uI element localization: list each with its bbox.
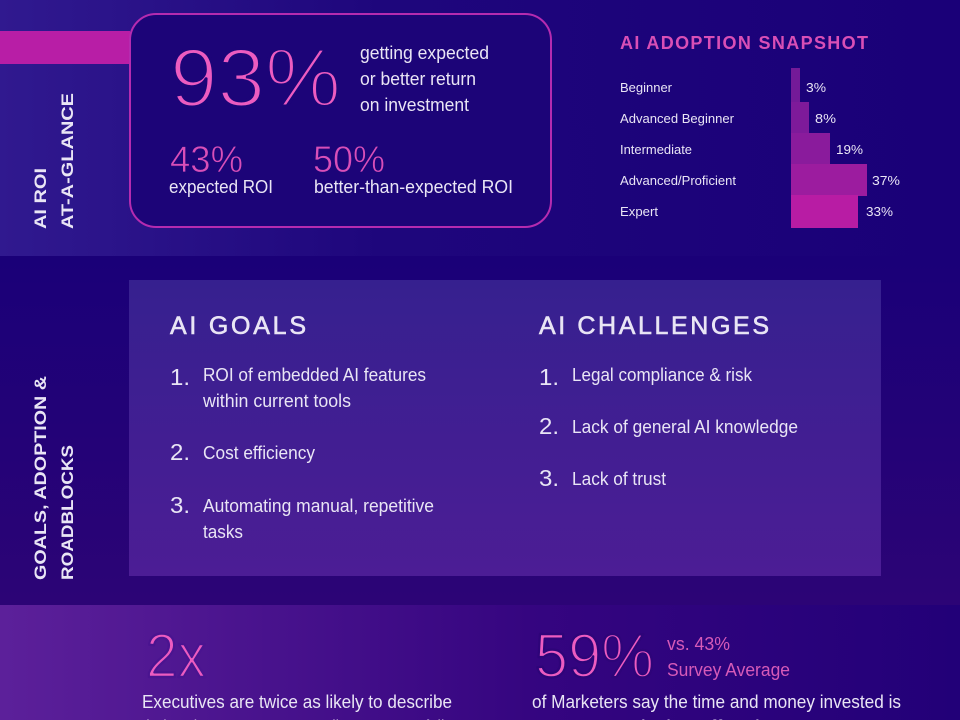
stat: 59% of marketers: vs. 43% [667,634,730,654]
chart title: AI ADOPTION SNAPSHOT [620,33,868,53]
bar values: 8% [815,111,836,126]
goal 1: 1. [170,364,190,390]
goals and challenges card [129,280,881,576]
section heading: goals, adoption and roadblocks: ROADBLOCKS [58,445,77,580]
stat: 93%: 93% [170,31,341,124]
challenge 3 [539,465,666,491]
category labels: Beginner [620,80,673,95]
category labels: Advanced/Proficient [620,173,736,188]
panel: AI ROI at-a-glance [0,0,960,256]
category labels [620,80,736,219]
magenta tab [0,31,130,64]
section heading: AI ROI at-a-glance: AI ROI [31,168,50,229]
goal 1 [170,364,426,411]
93% description: getting expected [360,43,489,63]
stat: 43% expected ROI: expected ROI [169,177,273,197]
section heading: goals, adoption and roadblocks: GOALS, ADOPTION & [31,376,50,580]
challenge 3: Lack of trust [572,469,666,489]
stat: 2x executives: 2x [146,622,206,691]
ROI stats card [130,14,551,227]
challenge 1: Legal compliance & risk [572,365,753,385]
93% description: or better return [360,69,476,89]
stat: 59% of marketers: 59% [535,622,654,691]
bar values: 19% [836,142,863,157]
bar values [806,80,900,219]
section heading: AI ROI at-a-glance [31,93,77,229]
stat: 59% of marketers: Survey Average [667,660,790,680]
heading: AI challenges: AI CHALLENGES [539,312,769,340]
section heading: AI ROI at-a-glance: AT-A-GLANCE [58,93,77,229]
heading: AI goals: AI GOALS [170,312,306,340]
AI challenges list [539,312,798,491]
goal 3 [170,492,434,542]
goal 2: 2. [170,439,190,465]
goal 2 [170,439,315,465]
category labels: Intermediate [620,142,692,157]
goal 1: within current tools [202,391,351,411]
stat: 50% better-than-expected ROI [313,139,513,197]
stat: 59% of marketers: of Marketers say the time and money invested is [532,692,901,712]
93% description: on investment [360,95,469,115]
challenge 2 [539,413,798,439]
chart: AI adoption snapshot [620,33,900,228]
section heading: goals, adoption and roadblocks [31,376,77,580]
panel: goals, adoption and roadblocks [31,280,881,580]
category labels: Advanced Beginner [620,111,735,126]
bar values: 3% [806,80,826,95]
bars [791,68,867,228]
AI goals list [170,312,434,542]
stat: 50% better-than-expected ROI: 50% [313,139,385,180]
stat: 43% expected ROI: 43% [170,139,243,180]
bar values: 37% [872,173,900,188]
bar values: 33% [866,204,893,219]
category labels: Expert [620,204,658,219]
goal 2: Cost efficiency [203,443,315,463]
goal 3: 3. [170,492,190,518]
panel: executives and marketers stats [0,605,960,720]
challenge 1 [539,364,753,390]
challenge 2: Lack of general AI knowledge [572,417,798,437]
goal 1: ROI of embedded AI features [203,365,426,385]
challenge 1: 1. [539,364,559,390]
stat: 2x executives: Executives are twice as likely to describe [142,692,452,712]
93% description [360,43,489,115]
goal 3: tasks [203,522,243,542]
goal 3: Automating manual, repetitive [203,496,434,516]
stat: 43% expected ROI [169,139,273,197]
challenge 3: 3. [539,465,559,491]
challenge 2: 2. [539,413,559,439]
stat: 2x executives [142,622,452,720]
stat: 50% better-than-expected ROI: better-than-expected ROI [314,177,513,197]
stat: 59% of marketers [532,622,901,720]
